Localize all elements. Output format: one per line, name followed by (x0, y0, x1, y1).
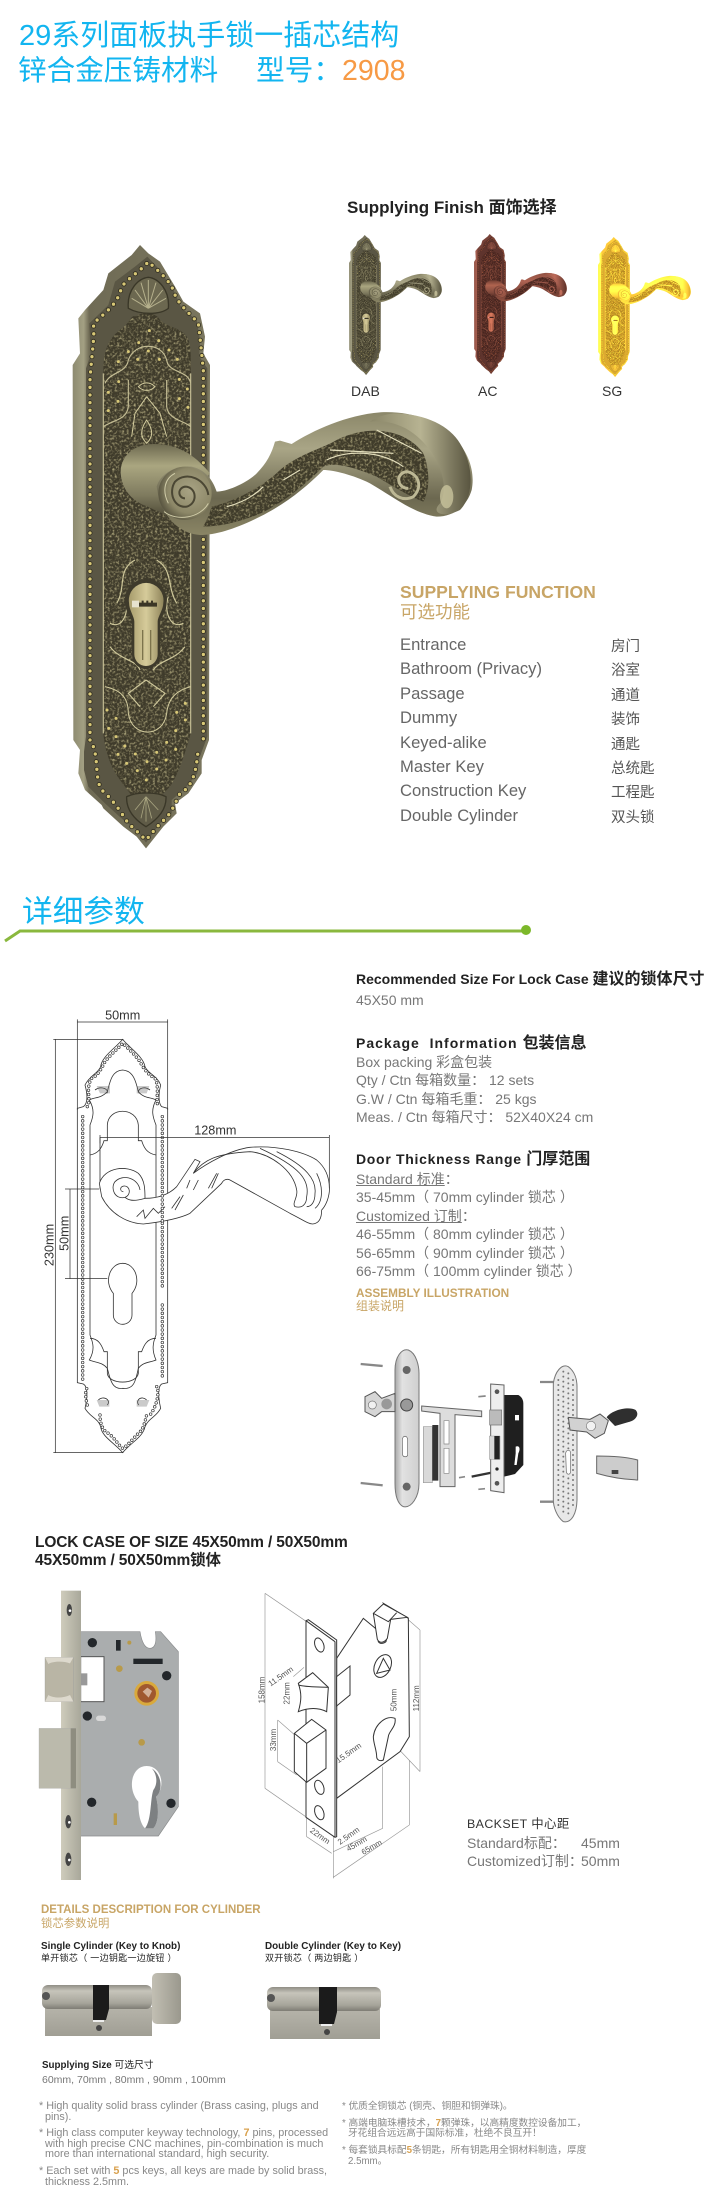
euro cylinder hole (132, 1766, 161, 1828)
spec: door thickness range: Door Thickness Range 门厚范围 (356, 1151, 590, 1168)
assembly heading (356, 1286, 509, 1313)
dimension labels: 15.5mm (334, 1741, 363, 1765)
spec: recommended size: 45X50 mm (356, 992, 424, 1008)
assembly heading: 组装说明 (356, 1299, 404, 1313)
function list: Double Cylinder (400, 806, 518, 825)
lock case heading: 45X50mm / 50X50mm锁体 (35, 1552, 221, 1569)
chinese details list: * 高端电脑珠槽技术，7颗弹珠，以高精度数控设备加工， (342, 2118, 586, 2129)
backset info: BACKSET 中心距 (467, 1817, 570, 1831)
backset info: 50mm (581, 1853, 620, 1869)
double cylinder photo (267, 1987, 381, 2039)
function list: 房门 (611, 639, 640, 655)
double cylinder caption: 双开锁芯（ 两边钥匙 ） (265, 1953, 364, 1963)
cylinder section heading: 锁芯参数说明 (41, 1918, 109, 1930)
heading: supplying finish: Supplying Finish 面饰选择 (347, 198, 557, 217)
chinese details list: 牙花组合远远高于国际标准，杜绝不良互开！ (348, 2128, 542, 2139)
dead bolt (294, 1719, 326, 1782)
function list: 通道 (611, 688, 640, 704)
title: 29系列面板执手锁一插芯结构 (19, 20, 399, 52)
function list: Passage (400, 684, 465, 703)
spindle hub (134, 1681, 159, 1706)
chinese details list: 2.5mm。 (348, 2156, 387, 2167)
beaded border band (84, 257, 207, 843)
english details list: more than international standard, high security. (45, 2148, 269, 2160)
dimension labels: 50mm (57, 1216, 71, 1251)
dimension lines (53, 1019, 329, 1453)
english details list: thickness 2.5mm. (45, 2176, 129, 2188)
ornamental centre panel (103, 313, 191, 803)
spec: door thickness range: 46-55mm（ 80mm cylinder 锁芯 ） (356, 1226, 574, 1242)
spec: package information (356, 1034, 593, 1125)
english details list: with high precise CNC machines, pin-combination is much (45, 2138, 323, 2150)
photo: mortise lock case (38, 1590, 179, 1880)
keyhole cylinder (125, 579, 167, 669)
bead rows (83, 1043, 162, 1448)
function list: Construction Key (400, 781, 526, 800)
supplying size: Supplying Size 可选尺寸 (42, 2060, 154, 2071)
gold studs (107, 331, 188, 780)
function list: 双头锁 (611, 810, 654, 826)
left plate and knob (365, 1350, 419, 1507)
strike plate and box (422, 1406, 482, 1487)
single cylinder caption: Single Cylinder (Key to Knob) (41, 1941, 180, 1952)
lever outline (99, 1147, 329, 1224)
function list: 装饰 (611, 712, 640, 728)
spec: door thickness range: 66-75mm（ 100mm cylinder 锁芯 ） (356, 1263, 582, 1279)
supplying function heading: 可选功能 (400, 602, 470, 622)
screws and details (83, 1638, 176, 1808)
spec: package information: Meas. / Ctn 每箱尺寸： 52X40X24 cm (356, 1109, 593, 1125)
finish option: SG (598, 237, 691, 378)
dimension leader lines (265, 1593, 420, 1878)
cylinder section heading (41, 1904, 261, 1930)
main product photo: door handle (72, 245, 473, 848)
faceplate (61, 1591, 81, 1880)
section divider with green dot (4, 925, 531, 942)
bottom shell ornament (127, 793, 166, 827)
supplying size: 60mm, 70mm , 80mm , 90mm , 100mm (42, 2074, 226, 2086)
scroll rosette (158, 467, 212, 520)
dimension line drawing (42, 1009, 330, 1454)
spec: package information: Qty / Ctn 每箱数量： 12 sets (356, 1072, 534, 1088)
knob barrel (121, 444, 210, 517)
dimension labels (42, 1009, 236, 1266)
spec: door thickness range: 35-45mm（ 70mm cylinder 锁芯 ） (356, 1189, 574, 1205)
dimension labels: 22mm (282, 1682, 291, 1704)
backset info (467, 1817, 620, 1869)
dimension labels: 50mm (105, 1009, 140, 1023)
english details list: * High class computer keyway technology, 7 pins, processed (39, 2127, 328, 2139)
keyhole (108, 1263, 137, 1324)
spec: recommended size: Recommended Size For Lock Case 建议的锁体尺寸 (356, 971, 705, 988)
double cylinder caption (265, 1941, 401, 1963)
spec: recommended size (356, 970, 705, 1008)
dimension labels: 50mm (390, 1689, 399, 1711)
backset info: Customized订制： (467, 1853, 583, 1869)
assembly heading: ASSEMBLY ILLUSTRATION (356, 1286, 509, 1300)
function list: Entrance (400, 635, 466, 654)
lock case heading (35, 1534, 348, 1569)
dimension labels: 65mm (360, 1838, 384, 1857)
chinese details list: * 优质全铜锁芯 (铜壳、铜胆和铜弹珠)。 (342, 2101, 513, 2112)
title (18, 20, 406, 87)
backset info: Standard标配： (467, 1835, 566, 1851)
arched inner line work (103, 346, 191, 733)
lock body (81, 1632, 178, 1836)
spec: door thickness range (356, 1150, 590, 1279)
english details list: pins). (45, 2111, 71, 2123)
right plate and lever (553, 1366, 638, 1522)
finish labels: SG (602, 383, 622, 399)
english details list: * Each set with 5 pcs keys, all keys are made by solid brass, (39, 2165, 327, 2177)
latch bolt (45, 1657, 73, 1702)
dimension labels: 112mm (412, 1685, 421, 1711)
function list: Keyed-alike (400, 733, 487, 752)
function list: Dummy (400, 708, 457, 727)
dimension labels: 11.5mm (267, 1665, 295, 1688)
latch window (81, 1657, 104, 1702)
function list: Bathroom (Privacy) (400, 659, 542, 678)
spec: package information: Box packing 彩盒包装 (356, 1054, 492, 1070)
dimension labels: 158mm (258, 1676, 267, 1703)
finish option: DAB (349, 235, 442, 375)
dimension labels (258, 1665, 421, 1857)
english details list: * High quality solid brass cylinder (Brass casing, plugs and (39, 2100, 319, 2112)
dimension labels: 230mm (42, 1224, 56, 1266)
spec: door thickness range: Standard 标准： (356, 1171, 459, 1187)
function list (400, 635, 654, 826)
backset info: 45mm (581, 1835, 620, 1851)
top shell ornament (128, 277, 168, 313)
lock case body lines (294, 1603, 409, 1837)
cylinder section heading: DETAILS DESCRIPTION FOR CYLINDER (41, 1904, 261, 1916)
single cylinder photo (42, 1973, 181, 2036)
single cylinder caption (41, 1941, 180, 1963)
section heading: details: 详细参数 (22, 894, 145, 929)
inner panel lines (89, 1070, 156, 1388)
function list: 浴室 (611, 663, 640, 679)
supplying size (42, 2060, 226, 2086)
lock case heading: LOCK CASE OF SIZE 45X50mm / 50X50mm (35, 1534, 348, 1551)
backplate (73, 245, 210, 848)
mortise lock (489, 1384, 523, 1493)
dimension labels: 45mm (345, 1834, 369, 1853)
single cylinder caption: 单开锁芯（ 一边钥匙一边旋钮 ） (41, 1953, 177, 1963)
dimension labels: 128mm (194, 1123, 236, 1137)
supplying function heading (400, 582, 596, 622)
spec: package information: Package Information 包装信息 (356, 1035, 586, 1052)
function list: 总统匙 (611, 761, 654, 777)
chinese details list: * 每套锁具标配5条钥匙，所有钥匙用全铜材料制造，厚度 (342, 2145, 586, 2156)
technical drawing: lock case dimensions (258, 1593, 421, 1878)
finish labels (351, 383, 622, 399)
spec: package information: G.W / Ctn 每箱毛重： 25 kgs (356, 1091, 536, 1107)
double cylinder caption: Double Cylinder (Key to Key) (265, 1941, 401, 1952)
dimension labels: 22mm (308, 1826, 332, 1846)
function list: Master Key (400, 757, 484, 776)
spec: door thickness range: Customized 订制： (356, 1208, 476, 1224)
supplying function heading: SUPPLYING FUNCTION (400, 582, 596, 602)
dimension labels: 33mm (269, 1729, 278, 1751)
screws (361, 1364, 555, 1502)
chinese details list (342, 2100, 586, 2167)
function list: 工程匙 (611, 785, 654, 801)
carved lever ornament (203, 431, 428, 527)
title: 锌合金压铸材料 型号：2908 (18, 55, 406, 87)
latch bolt (298, 1673, 328, 1712)
function list: 通匙 (611, 737, 640, 753)
spec: door thickness range: 56-65mm（ 90mm cylinder 锁芯 ） (356, 1245, 574, 1261)
dead bolt (39, 1728, 75, 1788)
finish labels: AC (478, 383, 497, 399)
finish option: AC (474, 234, 567, 374)
dimension labels: 2.5mm (336, 1825, 361, 1847)
corner scrolls (97, 1086, 149, 1407)
exploded assembly illustration (360, 1349, 638, 1522)
lever (157, 412, 473, 535)
finish labels: DAB (351, 383, 380, 399)
english details list (39, 2100, 328, 2188)
